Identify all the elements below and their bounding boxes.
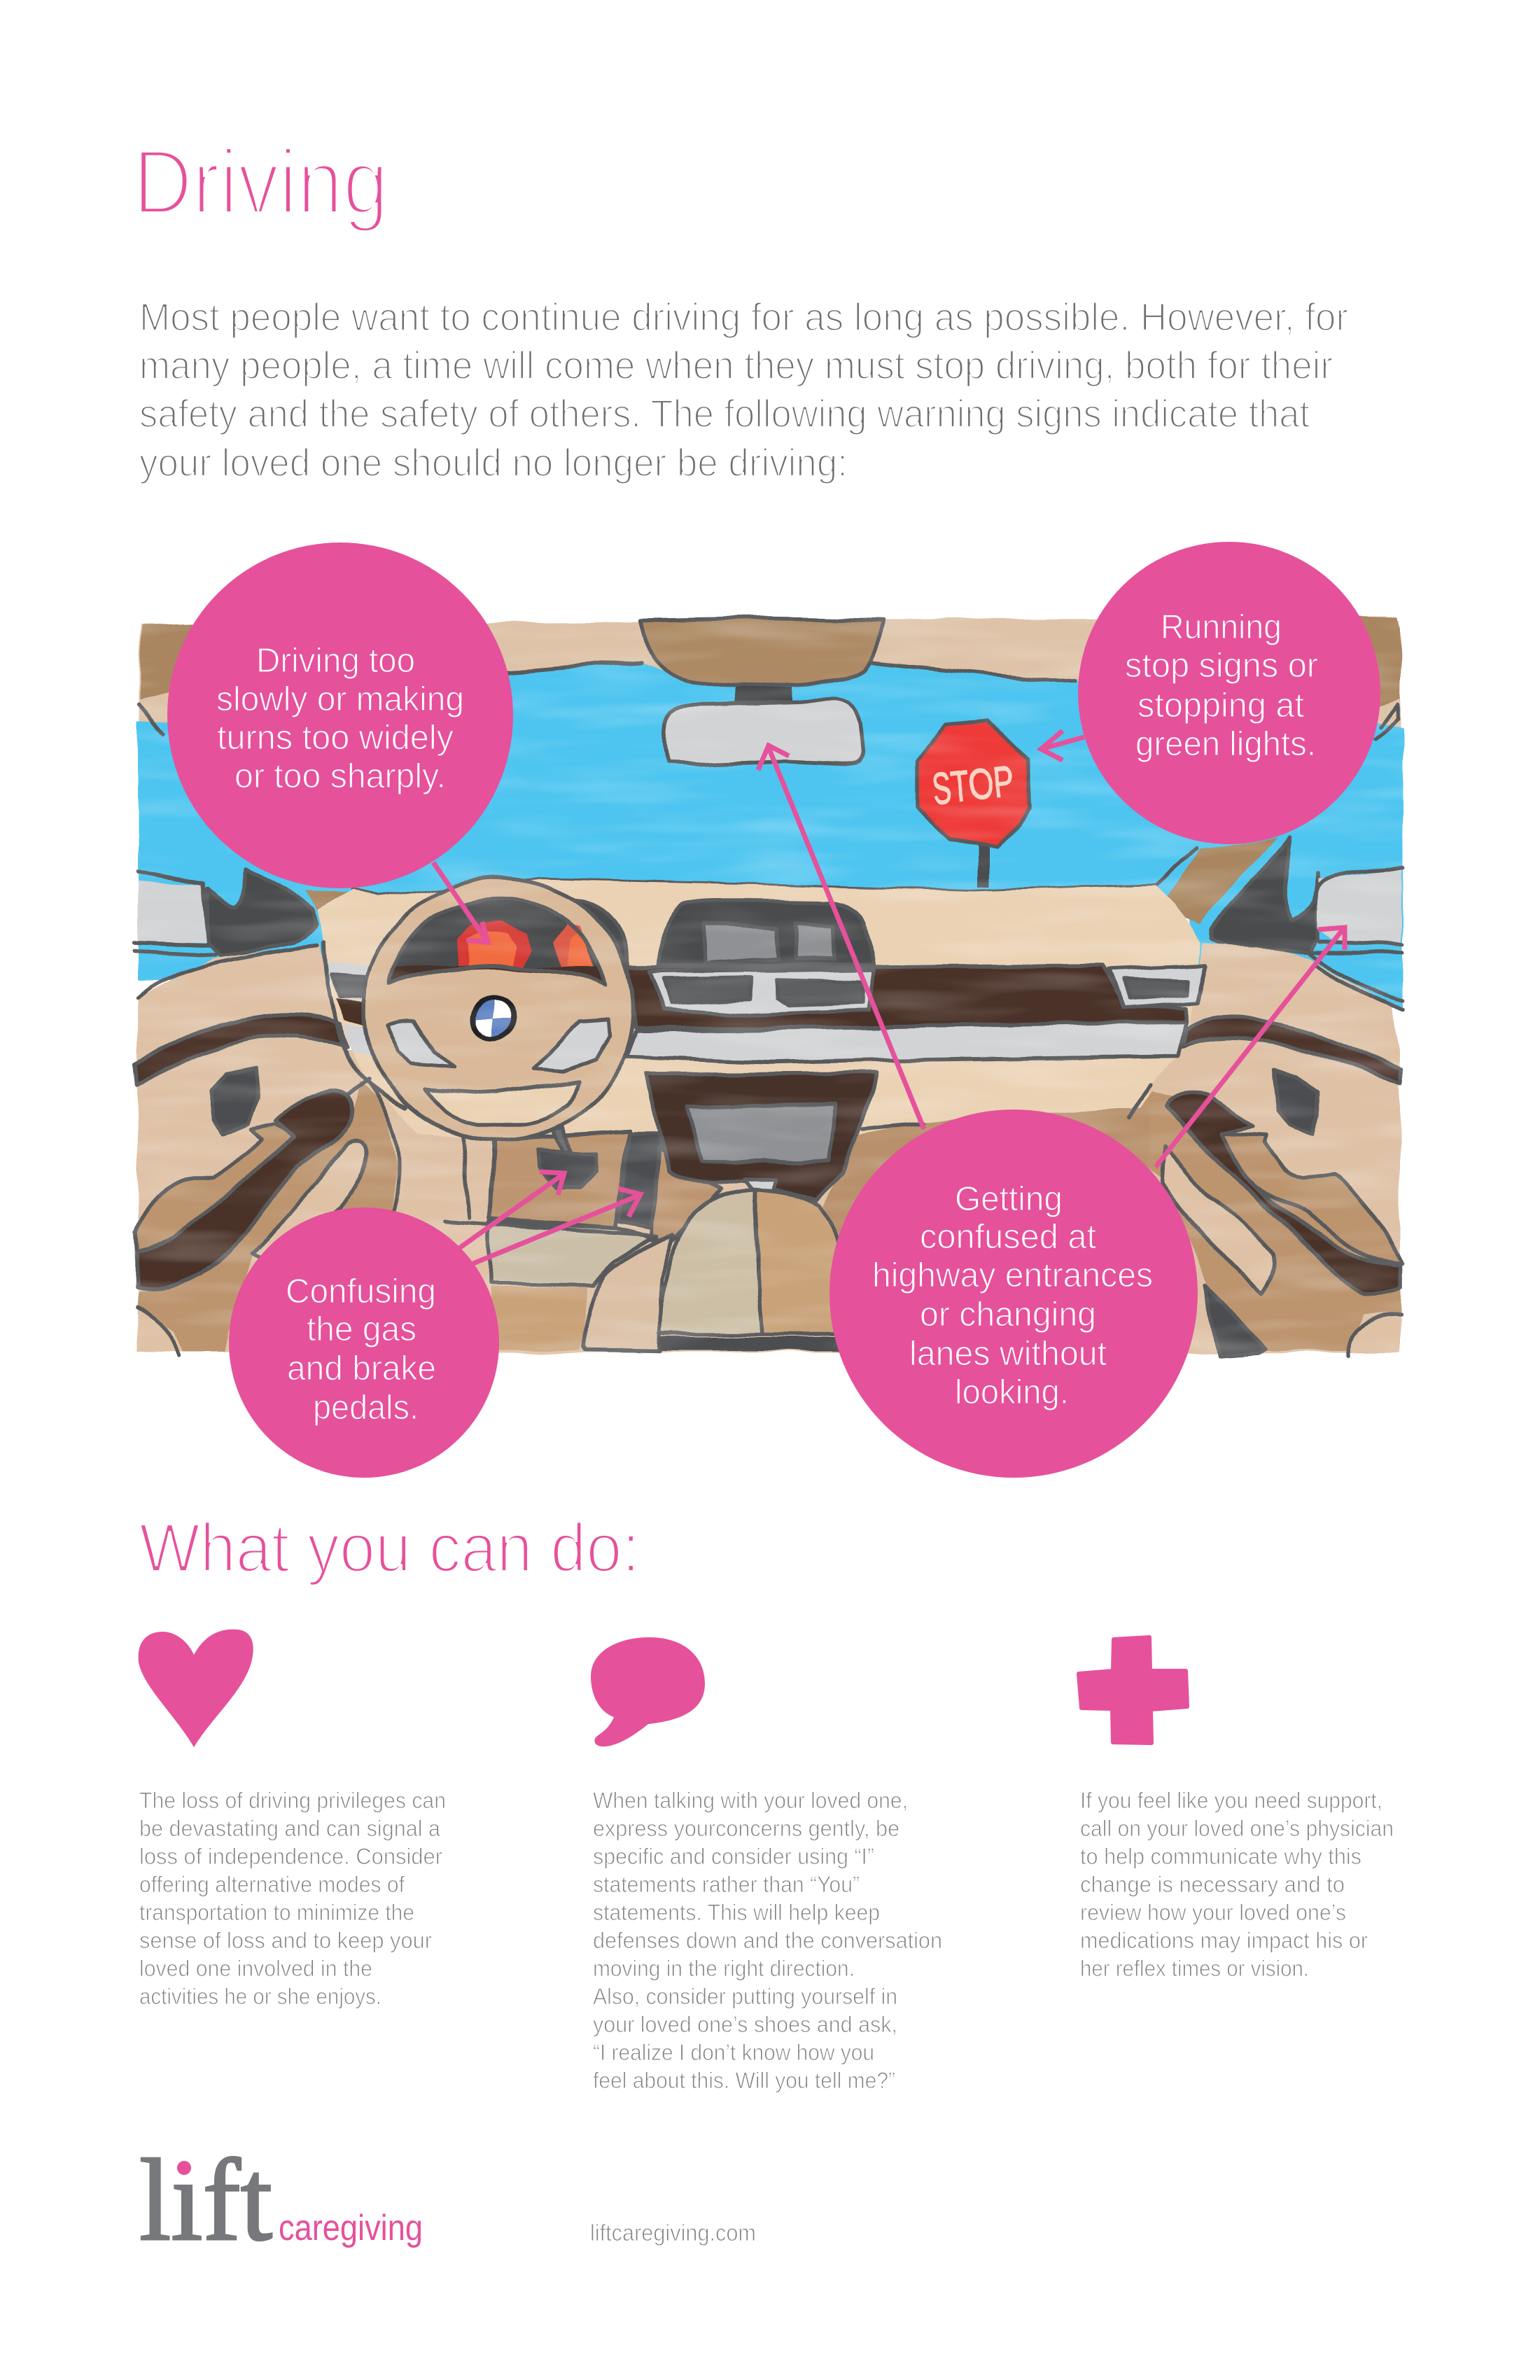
website url: liftcaregiving.com xyxy=(590,2220,756,2246)
left door handle xyxy=(135,1078,398,1357)
title: Driving xyxy=(133,130,388,233)
callout: running stop signs xyxy=(1078,542,1380,844)
callout: getting confused: lanes without xyxy=(909,1335,1107,1373)
column: loss of driving xyxy=(139,1788,446,2009)
silver dash band xyxy=(627,1023,1184,1063)
driver seat xyxy=(584,1234,674,1351)
left door panel xyxy=(137,944,491,1352)
arrow: to brake pedal xyxy=(459,1172,564,1248)
left wood stripe xyxy=(135,1015,348,1084)
arrow: to stop sign xyxy=(1041,731,1084,760)
left speaker xyxy=(210,1068,259,1135)
column: need support: to help communicate why this xyxy=(1080,1844,1362,1869)
column: loss of driving: transportation to minimize the xyxy=(139,1900,414,1925)
column: talking with your loved one: moving in the right direction. xyxy=(593,1956,855,1981)
heading: what you can do: What you can do: xyxy=(139,1509,640,1586)
BMW badge xyxy=(471,997,517,1042)
callout: running stop signs: stopping at xyxy=(1138,687,1304,724)
stop sign xyxy=(916,721,1030,846)
rear view mirror xyxy=(664,700,864,764)
callout: driving too slowly: slowly or making xyxy=(216,680,464,718)
column: need support: call on your loved one’s physician xyxy=(1080,1816,1394,1841)
corner trim left and right xyxy=(141,617,1401,706)
callout: running stop signs: green lights. xyxy=(1135,725,1316,763)
column: need support: her reflex times or vision. xyxy=(1080,1956,1309,1981)
logo: lift caregiving: lift xyxy=(139,2136,272,2265)
lower seat panel xyxy=(490,1287,587,1350)
right side mirror xyxy=(1212,704,1403,953)
column: talking with your loved one: express yourconcerns gently, be xyxy=(593,1816,899,1841)
center vents xyxy=(649,969,872,1016)
arrow: to side mirror xyxy=(1156,927,1345,1167)
intro paragraph: safety and the safety of others. The following warning signs indicate that xyxy=(139,391,1310,435)
column: talking with your loved one: Also, consider putting yourself in xyxy=(593,1984,897,2009)
visor xyxy=(640,619,886,686)
callout: driving too slowly: turns too widely xyxy=(217,719,454,757)
footwell xyxy=(490,1131,630,1228)
intro paragraph xyxy=(139,295,1348,484)
instrument hood xyxy=(427,897,630,973)
column: talking with your loved one: defenses down and the conversation xyxy=(593,1928,942,1953)
center armrest right xyxy=(754,1190,861,1334)
column: need support: medications may impact his or xyxy=(1080,1928,1368,1953)
column: need support: review how your loved one’s xyxy=(1080,1900,1346,1925)
right speaker xyxy=(1274,1071,1316,1134)
brake arm xyxy=(551,1128,571,1153)
right door edge lines xyxy=(1309,953,1403,1009)
arrow: to gauges xyxy=(433,862,488,942)
footwell beside console xyxy=(652,1148,721,1239)
lower cabin base xyxy=(137,1050,1400,1354)
callout: getting confused: or changing xyxy=(920,1296,1096,1334)
steering wheel xyxy=(364,878,634,1140)
callout: confusing pedals: pedals. xyxy=(313,1389,419,1427)
left pillar stub xyxy=(304,889,364,930)
callout: getting confused: looking. xyxy=(955,1373,1069,1411)
arrow: to gas pedal xyxy=(473,1189,640,1264)
column: talking with your loved one: specific and consider using “I” xyxy=(593,1844,874,1869)
wheel lower opening xyxy=(424,1082,580,1125)
dashboard body xyxy=(316,879,1200,1140)
left side mirror xyxy=(133,704,316,956)
wheel left opening xyxy=(388,1019,454,1068)
steering column lines xyxy=(444,1137,658,1236)
intro paragraph: your loved one should no longer be driving: xyxy=(139,440,848,484)
intro paragraph: Most people want to continue driving for as long as possible. However, for xyxy=(139,295,1348,339)
stop sign post xyxy=(977,844,989,887)
column: talking with your loved one: statements rather than “You” xyxy=(593,1872,860,1897)
callout: driving too slowly: Driving too xyxy=(256,642,415,680)
dash wood trim xyxy=(629,964,1184,1029)
mirror stem xyxy=(734,686,792,707)
brake pedal xyxy=(538,1149,596,1189)
column: talking with your loved one: “I realize I don’t know how you xyxy=(593,2040,874,2065)
callout: getting confused xyxy=(830,1110,1198,1478)
callout: getting confused: confused at xyxy=(920,1218,1096,1256)
logo: lift caregiving: caregiving xyxy=(279,2208,423,2248)
logo: lift caregiving xyxy=(139,2136,423,2265)
column: loss of driving: loss of independence. Consider xyxy=(139,1844,442,1869)
windshield edge lines xyxy=(352,662,1196,897)
callout: driving too slowly: or too sharply. xyxy=(234,757,446,795)
gauges xyxy=(458,922,595,966)
callout: getting confused: highway entrances xyxy=(872,1256,1153,1294)
seat cushion xyxy=(490,1222,652,1285)
column: loss of driving: activities he or she enjoys. xyxy=(139,1984,382,2009)
callout: confusing pedals: Confusing xyxy=(286,1273,436,1310)
footwell right xyxy=(821,1106,1148,1260)
header lining xyxy=(140,617,1400,728)
left door edge lines xyxy=(137,946,318,997)
column: talking with your loved one: statements. This will help keep xyxy=(593,1900,880,1925)
column: talking with your loved one xyxy=(593,1788,942,2093)
center stack hood xyxy=(657,900,872,965)
left vent and trim xyxy=(324,942,405,1108)
callout: driving too slowly xyxy=(167,542,513,888)
console base bar xyxy=(660,1337,861,1351)
wheel right opening xyxy=(533,1019,610,1072)
column: loss of driving: be devastating and can signal a xyxy=(139,1816,440,1841)
column: talking with your loved one: your loved one’s shoes and ask, xyxy=(593,2012,897,2037)
column: loss of driving: offering alternative modes of xyxy=(139,1872,405,1897)
right door handle xyxy=(1122,1090,1402,1356)
column: need support xyxy=(1080,1788,1394,1981)
illustration: car interior xyxy=(133,617,1403,1357)
lower dash line xyxy=(863,1084,1152,1128)
column: need support: If you feel like you need support, xyxy=(1080,1788,1382,1813)
column: loss of driving: The loss of driving privileges can xyxy=(139,1788,446,1813)
gas pedal xyxy=(618,1134,660,1228)
icon: plus cross xyxy=(1079,1637,1187,1743)
callout: getting confused: Getting xyxy=(955,1180,1063,1218)
column: loss of driving: loved one involved in the xyxy=(139,1956,372,1981)
stop sign: STOP xyxy=(930,755,1016,815)
callout: running stop signs: stop signs or xyxy=(1125,647,1318,685)
icon: speech bubble xyxy=(591,1637,705,1746)
wheel trim strip xyxy=(391,966,606,984)
right wood stripe xyxy=(1182,1018,1401,1082)
right pillar stub xyxy=(1166,836,1278,925)
column: loss of driving: sense of loss and to keep your xyxy=(139,1928,432,1953)
callout: confusing pedals xyxy=(229,1208,499,1478)
center armrest left xyxy=(660,1190,763,1334)
column: talking with your loved one: When talking with your loved one, xyxy=(593,1788,908,1813)
windshield and side windows xyxy=(137,662,1403,1008)
column: talking with your loved one: feel about this. Will you tell me?” xyxy=(593,2068,895,2093)
intro paragraph: many people, a time will come when they must stop driving, both for their xyxy=(139,343,1333,387)
icon: heart xyxy=(139,1630,253,1747)
callout: confusing pedals: and brake xyxy=(287,1350,436,1387)
callout: confusing pedals: the gas xyxy=(307,1310,416,1348)
center console xyxy=(646,1073,876,1200)
right door panel xyxy=(1134,942,1400,1352)
callout: running stop signs: Running xyxy=(1161,608,1282,646)
arrow: to rear view mirror xyxy=(758,746,924,1129)
right vent xyxy=(1109,964,1205,1009)
column: need support: change is necessary and to xyxy=(1080,1872,1345,1897)
